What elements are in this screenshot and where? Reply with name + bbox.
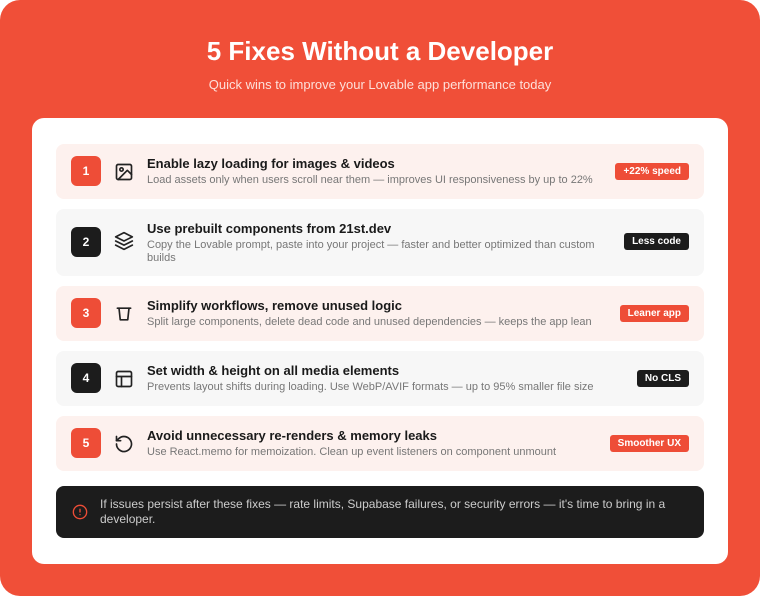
row 3: Simplify workflows, remove unused logic — [147, 298, 402, 313]
row 4: Prevents layout shifts during loading. Use WebP/AVIF formats — up to 95% smaller file size — [147, 381, 594, 393]
row 1 — [56, 144, 704, 199]
row 1: Load assets only when users scroll near them — improves UI responsiveness by up to 22% — [147, 174, 593, 186]
row 5 — [56, 416, 704, 471]
row 4: Set width & height on all media elements — [147, 363, 399, 378]
row 4: 4 — [83, 371, 89, 385]
callout: footer note — [56, 486, 704, 538]
row 2 — [56, 209, 704, 276]
panel: fixes card — [32, 118, 728, 564]
title: 5 Fixes Without a Developer — [207, 36, 553, 66]
callout: footer note: If issues persist after these fixes — rate limits, Supabase failures, or security errors — it's time to bring in a developer. — [100, 497, 665, 526]
icon: layout — [116, 370, 132, 388]
row 2: Use prebuilt components from 21st.dev — [147, 221, 391, 236]
icon: rotate — [116, 436, 132, 452]
row 2: 2 — [83, 235, 89, 249]
icon: layers — [114, 232, 134, 250]
icon: image — [116, 164, 132, 180]
row 3: 3 — [83, 306, 89, 320]
row 3: Split large components, delete dead code and unused dependencies — keeps the app lean — [147, 316, 592, 328]
icon: bin — [116, 307, 132, 321]
row 5: 5 — [83, 436, 89, 450]
row 1: +22% speed — [623, 166, 681, 177]
row 5: Smoother UX — [618, 438, 681, 449]
row 4 — [56, 351, 704, 406]
row 5: Use React.memo for memoization. Clean up event listeners on component unmount — [147, 446, 556, 458]
row 1: Enable lazy loading for images & videos — [147, 156, 395, 171]
row 2: Less code — [632, 236, 681, 247]
row 1: 1 — [83, 164, 89, 178]
subtitle: Quick wins to improve your Lovable app performance today — [209, 77, 551, 92]
row 5: Avoid unnecessary re-renders & memory leaks — [147, 428, 437, 443]
row 3: Leaner app — [628, 308, 681, 319]
row 2: Copy the Lovable prompt, paste into your project — faster and better optimized than custom builds — [147, 239, 595, 264]
row 3 — [56, 286, 704, 341]
icon: alert — [72, 504, 88, 520]
row 4: No CLS — [645, 373, 681, 384]
